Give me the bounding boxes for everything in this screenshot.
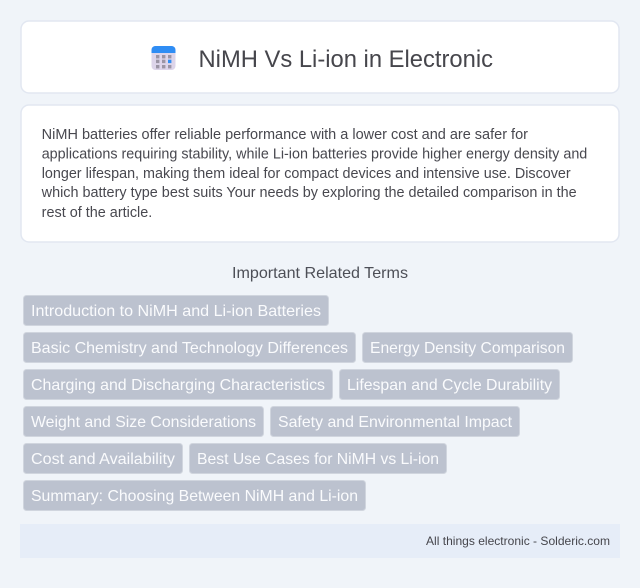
panel: description card <box>21 105 619 242</box>
tag: Summary: Choosing Between NiMH and Li-ion <box>31 488 358 505</box>
tag <box>190 444 446 474</box>
footer bar <box>20 524 620 558</box>
tag <box>24 444 182 474</box>
tag <box>340 370 560 400</box>
title: NiMH Vs Li-ion in Electronic <box>198 46 493 73</box>
icon: calendar <box>152 46 176 70</box>
panel: header card <box>21 21 619 93</box>
heading: related terms: Important Related Terms <box>232 265 408 282</box>
tag <box>24 296 328 326</box>
tag <box>24 406 264 436</box>
tag: Charging and Discharging Characteristics <box>31 377 325 394</box>
text block: description: applications requiring stability, while Li-ion batteries provide higher energy density and <box>42 146 587 162</box>
text block: description: NiMH batteries offer reliable performance with a lower cost and are safer for <box>42 127 528 143</box>
tag: Weight and Size Considerations <box>31 414 256 431</box>
text block: description: rest of the article. <box>42 205 152 221</box>
footer text: All things electronic - Solderic.com <box>426 534 610 548</box>
tag <box>24 332 356 362</box>
tag <box>24 370 332 400</box>
text block: description: which battery type best suits Your needs by exploring the detailed comparison in the <box>41 185 577 201</box>
text block: description: longer lifespan, making them ideal for compact devices and intensive use. Discover <box>42 166 571 182</box>
panel: term tags <box>24 296 572 510</box>
tag: Cost and Availability <box>31 451 175 468</box>
tag: Lifespan and Cycle Durability <box>347 377 552 394</box>
tag <box>24 480 366 510</box>
text block: description <box>41 127 587 221</box>
tag: Safety and Environmental Impact <box>278 414 513 431</box>
tag <box>362 332 572 362</box>
tag: Energy Density Comparison <box>370 340 565 357</box>
tag: Basic Chemistry and Technology Differences <box>31 340 348 357</box>
tag: Introduction to NiMH and Li-ion Batteries <box>31 303 321 320</box>
tag: Best Use Cases for NiMH vs Li-ion <box>197 451 439 468</box>
tag <box>270 406 520 436</box>
